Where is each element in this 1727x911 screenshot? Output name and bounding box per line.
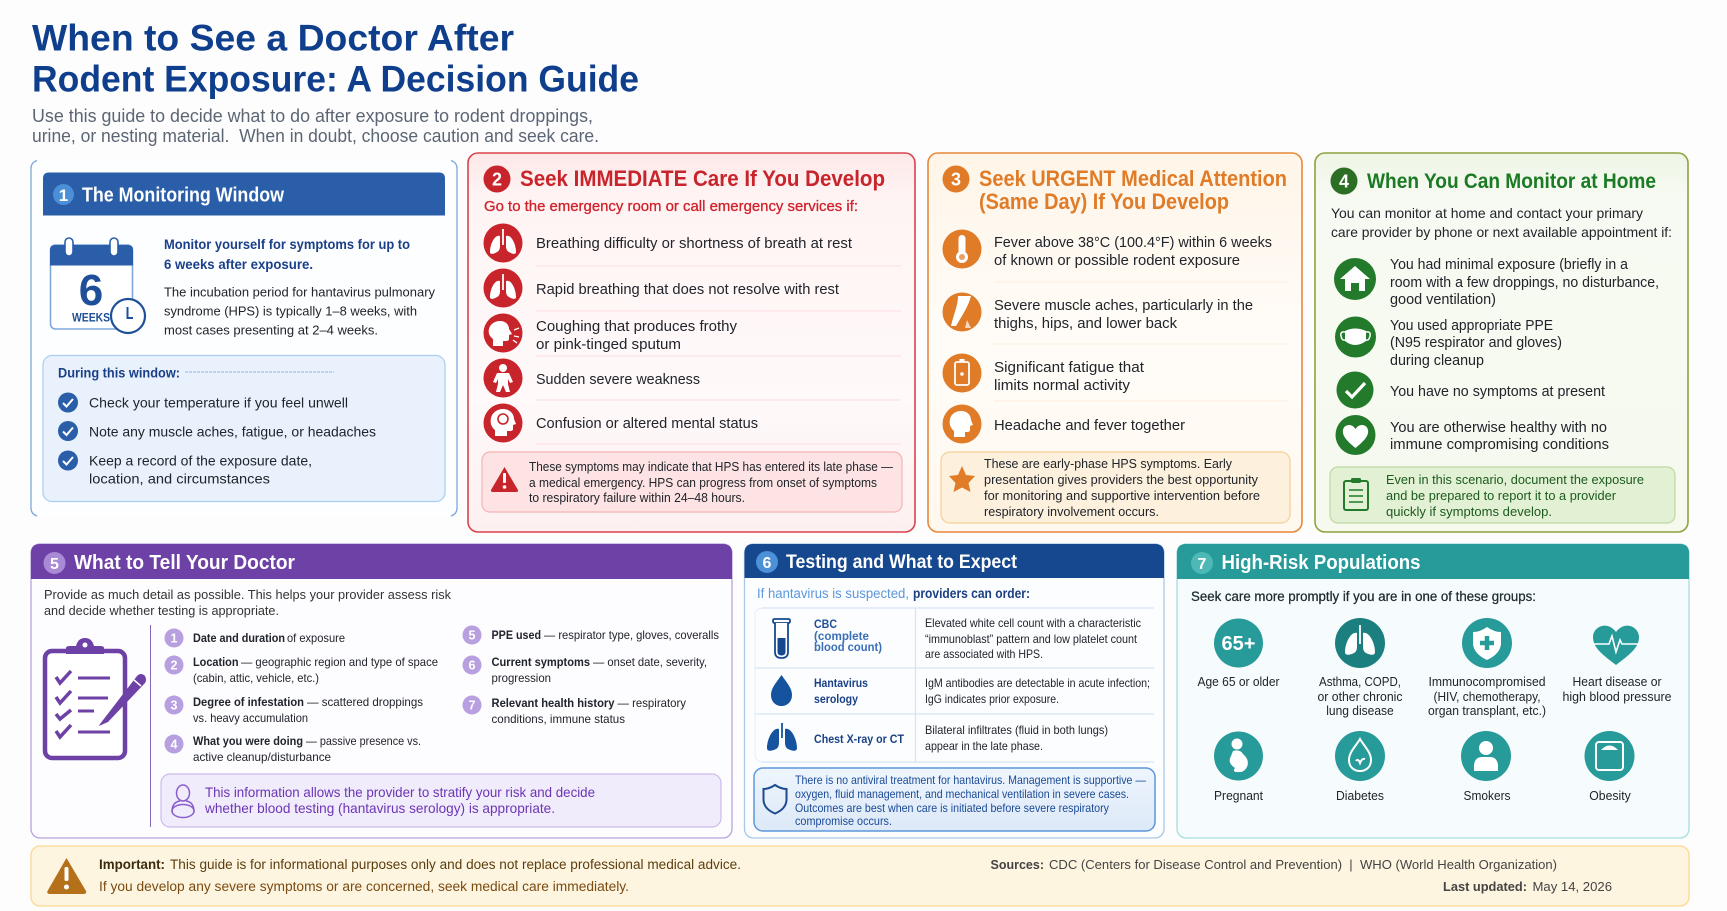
callout: no antiviral treatment — [754, 768, 1155, 831]
checklist item 3: location, and circumstances — [89, 470, 270, 486]
panel 3 heading: 3 — [951, 170, 961, 190]
symptom: breathing difficulty: Breathing difficulty or shortness of breath at rest — [536, 235, 853, 252]
panel 1: the monitoring window — [31, 160, 457, 516]
condition: no symptoms — [1336, 372, 1605, 408]
callout: stratify risk — [161, 774, 721, 827]
panel 5 intro: Provide as much detail as possible. This helps your provider assess risk — [44, 587, 451, 602]
panel 5 header: What to Tell Your Doctor — [74, 552, 295, 574]
panel 6 subheading: If hantavirus is suspected, — [757, 586, 909, 601]
callout: no antiviral treatment: oxygen, fluid management, and mechanical ventilation in severe cases. — [795, 787, 1129, 801]
sources: CDC (Centers for Disease Control and Prevention) | WHO (World Health Organization) — [1049, 857, 1557, 872]
panel 5 header — [31, 544, 732, 579]
condition: appropriate PPE: (N95 respirator and gloves) — [1390, 335, 1562, 351]
test row: CBC: CBC — [814, 617, 837, 631]
group: age 65: Age 65 or older — [1198, 675, 1280, 689]
checklist item 2: Note any muscle aches, fatigue, or headaches — [89, 424, 376, 440]
symptom: muscle aches: thighs, hips, and lower back — [994, 315, 1177, 332]
panel 7: high-risk populations — [1177, 544, 1689, 838]
panel 5 header: 5 — [50, 556, 59, 573]
panel 2 subheading: Go to the emergency room or call emergency services if: — [484, 198, 858, 215]
symptom: fatigue: limits normal activity — [994, 377, 1131, 394]
symptom: fever: of known or possible rodent exposure — [994, 252, 1240, 269]
test row: chest imaging: Bilateral infiltrates (fluid in both lungs) — [925, 723, 1108, 737]
item 5: PPE used: — respirator type, gloves, coveralls — [544, 628, 719, 642]
group: smokers — [1461, 731, 1511, 803]
title: When to See a Doctor After — [32, 18, 514, 58]
title: Rodent Exposure: A Decision Guide — [32, 58, 639, 100]
icon: clipboard — [1344, 478, 1368, 510]
disclaimer text — [99, 857, 741, 894]
callout: document the exposure: quickly if symptoms develop. — [1386, 504, 1552, 519]
group: heart disease: Heart disease or — [1572, 675, 1662, 689]
symptom: confusion — [484, 404, 758, 442]
test row: CBC: Elevated white cell count with a characteristic — [925, 616, 1141, 630]
item 6: current symptoms: Current symptoms — [492, 655, 590, 669]
during this window box: During this window: — [58, 366, 180, 380]
callout: early phase note: respiratory involvement occurs. — [984, 504, 1159, 519]
condition: no symptoms: You have no symptoms at present — [1390, 384, 1605, 400]
panel 1 header: 1 — [59, 186, 68, 205]
group: heart disease: high blood pressure — [1562, 690, 1672, 704]
item 5: PPE used: 5 — [469, 628, 476, 642]
subtitle: Use this guide to decide what to do after exposure to rodent droppings, — [32, 106, 593, 126]
tests table — [755, 608, 1154, 762]
panel 3 heading: (Same Day) If You Develop — [979, 189, 1229, 214]
item 4: what you were doing: What you were doing — [193, 734, 303, 748]
symptom: coughing sputum: Coughing that produces frothy — [536, 318, 737, 335]
symptom: fatigue — [942, 354, 1145, 394]
test row: serology: IgM antibodies are detectable in acute infection; — [925, 676, 1150, 690]
subtitle: urine, or nesting material. When in doubt, choose caution and seek care. — [32, 126, 599, 146]
test row: CBC: (complete — [814, 629, 869, 643]
during this window box — [43, 356, 445, 502]
icon: lungs — [767, 723, 797, 751]
panel 1 header — [43, 172, 445, 216]
item 4: what you were doing: — passive presence vs. — [306, 734, 421, 748]
test row: CBC: blood count) — [814, 640, 882, 654]
item 4: what you were doing: 4 — [171, 738, 178, 752]
item 4: what you were doing — [164, 734, 421, 764]
test row: CBC: are associated with HPS. — [925, 647, 1043, 661]
symptom: muscle aches: Severe muscle aches, particularly in the — [994, 297, 1253, 314]
icon: drop — [771, 675, 792, 706]
item 7: relevant health history — [462, 696, 686, 726]
item 5: PPE used: PPE used — [492, 628, 541, 642]
test row: serology — [771, 675, 1150, 706]
callout: no antiviral treatment: compromise occurs. — [795, 814, 892, 828]
panel 5 intro: and decide whether testing is appropriate. — [44, 603, 279, 618]
condition: appropriate PPE: You used appropriate PPE — [1390, 318, 1553, 334]
item 1: date and duration: 1 — [171, 632, 178, 646]
callout: document the exposure: Even in this scenario, document the exposure — [1386, 472, 1644, 487]
condition: otherwise healthy: You are otherwise healthy with no — [1390, 420, 1607, 436]
panel 4 heading: When You Can Monitor at Home — [1367, 170, 1656, 193]
item 6: current symptoms — [462, 655, 707, 685]
panel 4 intro: You can monitor at home and contact your primary — [1331, 205, 1643, 221]
panel 4 intro: care provider by phone or next available appointment if: — [1331, 224, 1672, 240]
title — [32, 18, 639, 100]
symptom: fever — [942, 230, 1272, 269]
item 1: date and duration — [164, 628, 345, 648]
test row: chest imaging: Chest X-ray or CT — [814, 732, 905, 746]
icon: warning triangle — [491, 467, 518, 492]
group: diabetes: Diabetes — [1336, 789, 1384, 803]
subtitle — [32, 106, 599, 146]
group: smokers: Smokers — [1464, 789, 1510, 803]
callout: no antiviral treatment: Outcomes are best when care is initiated before severe respiratory — [795, 801, 1109, 815]
callout: document the exposure: and be prepared to report it to a provider — [1386, 488, 1617, 503]
condition: minimal exposure: good ventilation) — [1390, 292, 1496, 308]
group: heart disease — [1562, 626, 1672, 704]
incubation text: most cases presenting at 2–4 weeks. — [164, 322, 378, 338]
group: immunocompromised: organ transplant, etc.) — [1428, 704, 1546, 718]
panel 3: seek urgent attention — [928, 153, 1302, 532]
group: immunocompromised — [1428, 618, 1546, 718]
panel 5 intro — [44, 587, 451, 618]
symptom: rapid breathing: Rapid breathing that does not resolve with rest — [536, 281, 840, 298]
panel 7 header — [1177, 544, 1689, 579]
test row: CBC — [773, 616, 1141, 661]
checklist item 1: Check your temperature if you feel unwell — [89, 394, 348, 410]
symptom: fatigue: Significant fatigue that — [994, 359, 1145, 376]
checklist item 3 — [58, 450, 312, 486]
item 3: degree of infestation — [164, 695, 423, 725]
last updated — [1443, 879, 1612, 894]
item 3: degree of infestation: 3 — [171, 698, 178, 712]
item 2: location: Location — [193, 655, 238, 669]
symptom: coughing sputum: or pink-tinged sputum — [536, 336, 681, 353]
icon: person — [172, 785, 194, 818]
symptom: confusion: Confusion or altered mental status — [536, 415, 758, 432]
panel 6 subheading: providers can order: — [913, 586, 1030, 601]
item 6: current symptoms: — onset date, severity, — [593, 655, 707, 669]
incubation text — [164, 284, 435, 338]
item 7: relevant health history: 7 — [469, 698, 476, 712]
icon: test tube — [773, 619, 790, 658]
group: age 65 — [1198, 618, 1280, 689]
panel 3 heading: Seek URGENT Medical Attention — [979, 166, 1287, 191]
item 3: degree of infestation: Degree of infestation — [193, 695, 304, 709]
group: immunocompromised: (HIV, chemotherapy, — [1434, 690, 1540, 704]
callout: late phase warning: a medical emergency. HPS can progress from onset of symptoms — [529, 475, 877, 490]
symptom: breathing difficulty — [484, 224, 853, 262]
panel 6 subheading — [757, 586, 1030, 601]
item 2: location: — geographic region and type of space — [241, 655, 438, 669]
callout: early phase note: These are early-phase HPS symptoms. Early — [984, 456, 1232, 471]
item 7: relevant health history: conditions, immune status — [492, 712, 625, 726]
group: chronic lung disease — [1318, 618, 1402, 718]
item 5: PPE used — [462, 626, 719, 644]
panel 4 heading: 4 — [1339, 172, 1349, 192]
group: immunocompromised: Immunocompromised — [1428, 675, 1546, 689]
panel 4 intro — [1331, 205, 1672, 240]
item 2: location: (cabin, attic, vehicle, etc.) — [193, 671, 319, 685]
condition: minimal exposure — [1334, 257, 1659, 308]
panel 5: what to tell your doctor — [31, 544, 732, 838]
last updated: May 14, 2026 — [1532, 879, 1612, 894]
symptom: muscle aches — [942, 292, 1253, 332]
icon: clipboard with pencil — [45, 638, 146, 758]
panel 1 header: The Monitoring Window — [82, 184, 284, 206]
test row: chest imaging: appear in the late phase. — [925, 739, 1043, 753]
symptom: fever: Fever above 38°C (100.4°F) within 6 weeks — [994, 234, 1272, 251]
item 2: location: 2 — [171, 658, 178, 672]
item 7: relevant health history: — respiratory — [618, 696, 686, 710]
callout: no antiviral treatment: There is no antiviral treatment for hantavirus. Management is supportive — — [795, 773, 1146, 787]
icon: caution triangle — [47, 858, 86, 894]
test row: CBC: “immunoblast” pattern and low platelet count — [925, 632, 1138, 646]
callout: early phase note — [941, 452, 1290, 523]
icon: shield — [764, 785, 786, 814]
callout: early phase note: for monitoring and supportive intervention before — [984, 488, 1260, 503]
panel 7 subheading: Seek care more promptly if you are in one of these groups: — [1191, 589, 1536, 604]
callout: late phase warning: These symptoms may indicate that HPS has entered its late phase — — [529, 459, 893, 474]
symptom: sudden weakness: Sudden severe weakness — [536, 371, 700, 388]
test row: chest imaging — [767, 723, 1108, 753]
group: chronic lung disease: Asthma, COPD, — [1319, 675, 1401, 689]
callout: late phase warning: to respiratory failure within 24–48 hours. — [529, 490, 745, 505]
condition: appropriate PPE — [1335, 316, 1562, 369]
monitoring lead text — [164, 237, 410, 272]
monitoring lead text: Monitor yourself for symptoms for up to — [164, 237, 410, 252]
callout: stratify risk: whether blood testing (hantavirus serology) is appropriate. — [204, 800, 555, 816]
panel 7 header: 7 — [1198, 556, 1207, 573]
item 1: date and duration: of exposure — [287, 631, 345, 645]
condition: otherwise healthy — [1336, 415, 1609, 455]
item 2: location — [164, 655, 438, 685]
item 1: date and duration: Date and duration — [193, 631, 285, 645]
group: pregnant: Pregnant — [1214, 789, 1264, 803]
condition: minimal exposure: You had minimal exposure (briefly in a — [1390, 257, 1629, 273]
panel 6 header: Testing and What to Expect — [786, 551, 1017, 573]
disclaimer text: This guide is for informational purposes only and does not replace professional medical advice. — [170, 857, 741, 872]
symptom: coughing sputum — [484, 314, 737, 353]
item 6: current symptoms: progression — [492, 671, 551, 685]
callout: stratify risk: This information allows the provider to stratify your risk and decide — [205, 784, 595, 800]
test row: serology: Hantavirus — [814, 676, 868, 690]
checklist item 3: Keep a record of the exposure date, — [89, 452, 312, 468]
panel 2 heading: 2 — [492, 170, 502, 190]
footer disclaimer bar — [31, 846, 1689, 906]
test row: serology: serology — [814, 692, 858, 706]
item 6: current symptoms: 6 — [469, 658, 476, 672]
symptom: sudden weakness — [484, 358, 700, 398]
icon: calendar six weeks — [50, 238, 145, 333]
panel 2: seek immediate care — [468, 153, 915, 532]
callout: late phase warning — [482, 452, 902, 512]
group: chronic lung disease: lung disease — [1326, 704, 1394, 718]
item 3: degree of infestation: vs. heavy accumulation — [193, 711, 308, 725]
symptom: rapid breathing — [484, 268, 840, 308]
disclaimer text: Important: — [99, 857, 165, 872]
test row: serology: IgG indicates prior exposure. — [925, 692, 1059, 706]
panel 7 header: High-Risk Populations — [1222, 552, 1420, 574]
monitoring lead text: 6 weeks after exposure. — [164, 257, 313, 272]
condition: otherwise healthy: immune compromising conditions — [1390, 437, 1609, 453]
incubation text: The incubation period for hantavirus pulmonary — [164, 284, 435, 300]
group: obesity — [1584, 731, 1634, 803]
symptom: headache: Headache and fever together — [994, 417, 1185, 434]
group: pregnant — [1214, 732, 1264, 803]
panel 4: monitor at home — [1315, 153, 1688, 532]
condition: minimal exposure: room with a few droppings, no disturbance, — [1390, 275, 1659, 291]
group: chronic lung disease: or other chronic — [1318, 690, 1402, 704]
disclaimer text: If you develop any severe symptoms or are concerned, seek medical care immediately. — [99, 879, 629, 894]
item 4: what you were doing: active cleanup/disturbance — [193, 750, 331, 764]
callout: document the exposure — [1330, 467, 1675, 523]
incubation text: syndrome (HPS) is typically 1–8 weeks, with — [164, 304, 417, 318]
icon: calendar six weeks: 6 — [79, 266, 103, 315]
symptom: headache — [942, 404, 1185, 444]
panel 2 heading: Seek IMMEDIATE Care If You Develop — [520, 166, 885, 191]
panel 6 header — [744, 544, 1164, 578]
group: obesity: Obesity — [1589, 789, 1631, 803]
panel 6: testing and what to expect — [744, 544, 1164, 838]
last updated: Last updated: — [1443, 879, 1527, 894]
icon: calendar six weeks: WEEKS — [72, 310, 110, 324]
item 7: relevant health history: Relevant health history — [492, 696, 615, 710]
icon: star — [949, 466, 975, 492]
callout: early phase note: presentation gives providers the best opportunity — [984, 472, 1258, 487]
condition: appropriate PPE: during cleanup — [1390, 353, 1484, 369]
group: diabetes — [1335, 731, 1385, 803]
panel 3 heading — [942, 166, 1287, 214]
item 3: degree of infestation: — scattered droppings — [307, 695, 423, 709]
panel 6 header: 6 — [763, 555, 772, 572]
sources: Sources: — [990, 857, 1044, 872]
group: age 65: 65+ — [1222, 633, 1255, 655]
